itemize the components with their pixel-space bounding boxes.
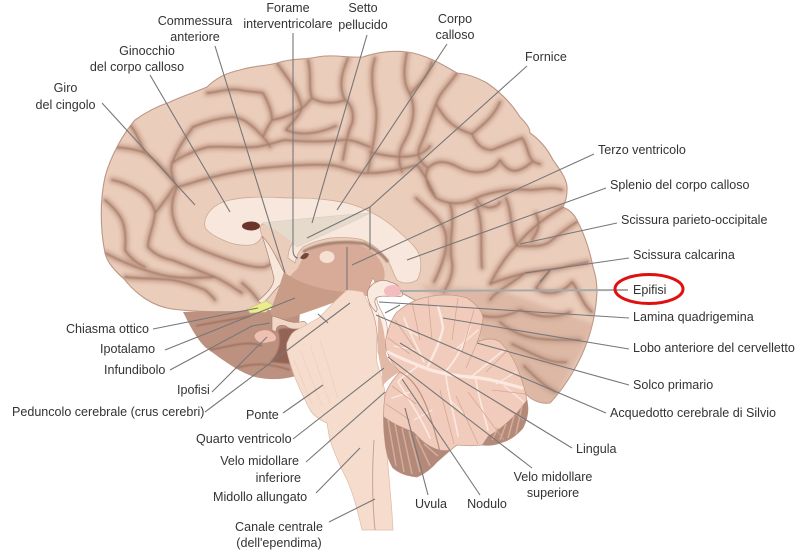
label: Uvula	[405, 408, 447, 511]
label: Ipofisi	[177, 337, 267, 397]
label: Scissura calcarina: Scissura calcarina	[633, 248, 735, 262]
label: Scissura parieto-occipitale	[520, 213, 767, 244]
label: Peduncolo cerebrale (crus cerebri): Peduncolo cerebrale (crus cerebri)	[12, 405, 204, 419]
interventricular foramen	[300, 253, 309, 259]
label: Splenio del corpo calloso: Splenio del corpo calloso	[610, 178, 750, 192]
label: Corpo calloso: calloso	[435, 28, 475, 42]
hypophysis	[254, 330, 276, 343]
label: Commessura anteriore	[158, 14, 285, 273]
label: Fornice	[307, 50, 567, 250]
label: Nodulo	[402, 379, 507, 511]
label: Solco primario	[477, 343, 713, 392]
label: Acquedotto cerebrale di Silvio	[376, 315, 776, 420]
label: Ginocchio del corpo calloso: del corpo calloso	[90, 60, 184, 74]
label: Corpo calloso	[337, 12, 475, 210]
label: Ipotalamo	[100, 298, 295, 356]
label: Giro del cingolo	[36, 81, 195, 205]
label: Ponte	[246, 385, 323, 422]
hypothalamus	[270, 272, 345, 322]
label: Setto pellucido	[312, 1, 388, 223]
label: Canale centrale (dell'ependima): Canale centrale	[235, 520, 323, 534]
label: Quarto ventricolo	[196, 368, 384, 446]
label: Uvula: Uvula	[415, 497, 447, 511]
label: Peduncolo cerebrale (crus cerebri)	[12, 303, 350, 419]
label: Commessura anteriore: Commessura	[158, 14, 232, 28]
label: Forame interventricolare: Forame	[266, 1, 310, 15]
label: Ponte: Ponte	[246, 408, 279, 422]
septum pellucidum	[262, 213, 370, 247]
label: Midollo allungato: Midollo allungato	[213, 490, 307, 504]
label: Ginocchio del corpo calloso: Ginocchio	[119, 44, 175, 58]
label: Nodulo: Nodulo	[467, 497, 507, 511]
label: Velo midollare superiore: Velo midollare	[514, 470, 592, 484]
cerebellum	[378, 295, 534, 482]
label: Setto pellucido: pellucido	[338, 18, 388, 32]
label: Scissura calcarina	[525, 248, 735, 282]
label: Canale centrale (dell'ependima): (dell'ependima)	[236, 536, 322, 550]
label: Terzo ventricolo	[347, 143, 686, 290]
interthalamic adhesion	[320, 251, 334, 263]
label: Infundibolo	[104, 323, 270, 377]
corpus callosum	[205, 197, 421, 283]
lamina terminalis pale band	[258, 236, 285, 304]
label: Epifisi: Epifisi	[633, 283, 666, 297]
label: Chiasma ottico	[66, 308, 258, 336]
label: Velo midollare inferiore: inferiore	[256, 471, 301, 485]
optic chiasm yellow	[247, 301, 273, 313]
label: Solco primario: Solco primario	[633, 378, 713, 392]
label: Lobo anteriore del cervelletto	[443, 318, 795, 355]
label: Setto pellucido: Setto	[348, 1, 378, 15]
central canal	[373, 440, 375, 530]
label: Midollo allungato	[213, 448, 360, 504]
epiphysis pink	[384, 285, 402, 297]
label: Ipotalamo: Ipotalamo	[100, 342, 155, 356]
label: Quarto ventricolo: Quarto ventricolo	[196, 432, 292, 446]
label: Scissura parieto-occipitale: Scissura parieto-occipitale	[621, 213, 767, 227]
dark interpeduncular recess	[270, 328, 302, 364]
arbor vitae white matter	[388, 306, 524, 438]
cerebellar dark lower folia	[384, 400, 528, 477]
infundibulum and mammillary outline	[272, 316, 306, 332]
label: Acquedotto cerebrale di Silvio: Acquedotto cerebrale di Silvio	[610, 406, 776, 420]
label: Splenio del corpo calloso	[407, 178, 750, 260]
aqueduct and tectum	[369, 278, 392, 364]
label: Ipofisi: Ipofisi	[177, 383, 210, 397]
cerebellar lower folia stripes	[388, 406, 522, 474]
third ventricle and thalamus	[286, 242, 385, 298]
label: Lobo anteriore del cervelletto: Lobo anteriore del cervelletto	[633, 341, 795, 355]
callout: red ellipse around Epifisi	[615, 274, 683, 304]
label: Giro del cingolo: Giro	[54, 81, 77, 95]
label: Infundibolo: Infundibolo	[104, 363, 165, 377]
label: Ginocchio del corpo calloso	[90, 44, 230, 212]
label: Giro del cingolo: del cingolo	[36, 98, 96, 112]
label: Forame interventricolare: interventricolare	[243, 17, 333, 31]
label: Lingula	[400, 343, 616, 456]
label: Velo midollare superiore: superiore	[527, 486, 579, 500]
label: Terzo ventricolo: Terzo ventricolo	[598, 143, 686, 157]
label: Commessura anteriore: anteriore	[170, 30, 220, 44]
label: Lamina quadrigemina	[379, 302, 754, 324]
occipital lower surface shading	[420, 285, 596, 410]
label: Fornice: Fornice	[525, 50, 567, 64]
fornix shadow	[303, 242, 388, 262]
label: Lamina quadrigemina: Lamina quadrigemina	[633, 310, 754, 324]
temporal lobe behind brainstem	[183, 310, 300, 379]
pineal region	[367, 280, 402, 312]
label: Lingula: Lingula	[576, 442, 616, 456]
label: Forame interventricolare	[243, 1, 333, 258]
cerebellar fissures	[386, 296, 526, 452]
gyri soft shading	[105, 52, 592, 392]
label: Velo midollare inferiore: Velo midollare	[220, 454, 299, 468]
fourth ventricle	[378, 312, 400, 386]
brain illustration	[101, 51, 597, 530]
label: Corpo calloso: Corpo	[438, 12, 472, 26]
anterior commissure dark oval	[242, 222, 260, 230]
label: Velo midollare inferiore	[220, 392, 385, 485]
label: Chiasma ottico: Chiasma ottico	[66, 322, 149, 336]
label: Canale centrale (dell'ependima)	[235, 499, 375, 550]
temporal lobe sulci	[196, 316, 290, 370]
cerebrum	[101, 51, 597, 410]
sulci lines	[105, 52, 592, 392]
pons striations	[294, 340, 338, 406]
brainstem: pons and medulla	[287, 290, 393, 530]
label: Velo midollare superiore	[388, 357, 592, 500]
